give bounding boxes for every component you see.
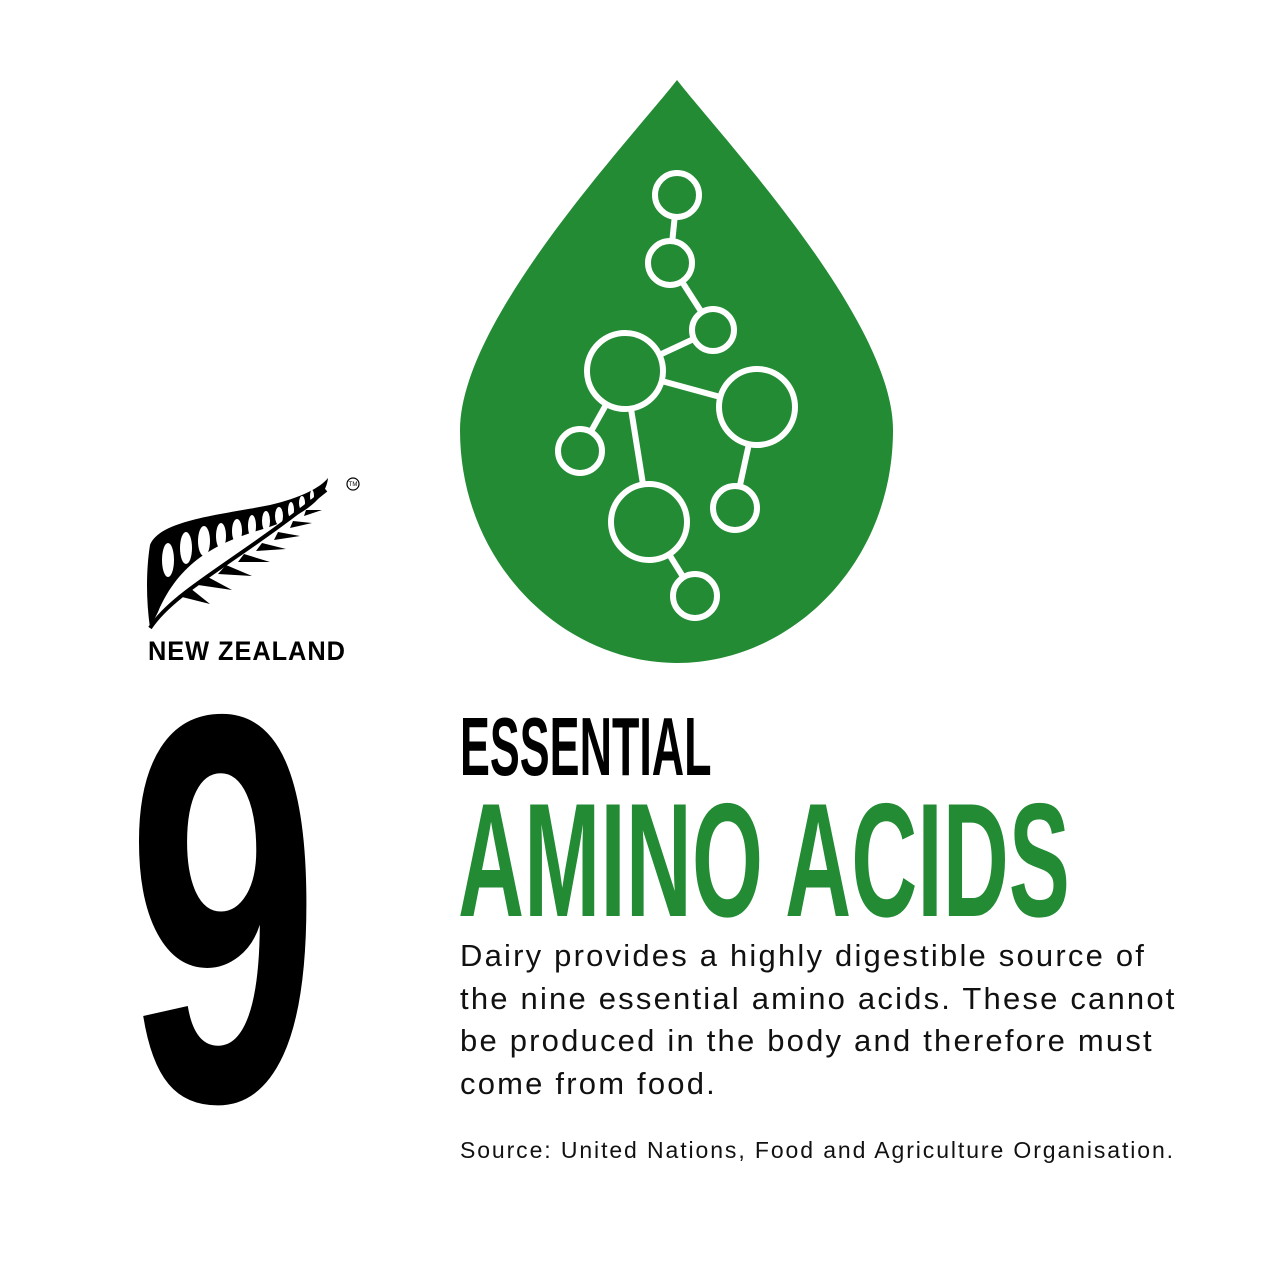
body text: the nine essential amino acids. These cannot xyxy=(460,980,1177,1016)
body text xyxy=(460,938,1177,1100)
molecule xyxy=(558,173,795,618)
big number 9: 9 xyxy=(127,600,319,1218)
icon: green drop with molecule xyxy=(460,80,893,663)
body text: be produced in the body and therefore must xyxy=(460,1023,1154,1058)
drop shape xyxy=(460,80,893,663)
heading: ESSENTIAL: ESSENTIAL xyxy=(460,700,712,793)
source note: Source: United Nations, Food and Agriculture Organisation. xyxy=(460,1137,1175,1163)
body text: Dairy provides a highly digestible source of xyxy=(460,938,1146,973)
logo: New Zealand fern xyxy=(147,477,360,666)
heading: AMINO ACIDS: AMINO ACIDS xyxy=(458,770,1070,951)
logo: New Zealand fern: TM xyxy=(349,482,357,488)
logo text: NEW ZEALAND xyxy=(148,636,346,666)
body text: come from food. xyxy=(460,1066,717,1100)
